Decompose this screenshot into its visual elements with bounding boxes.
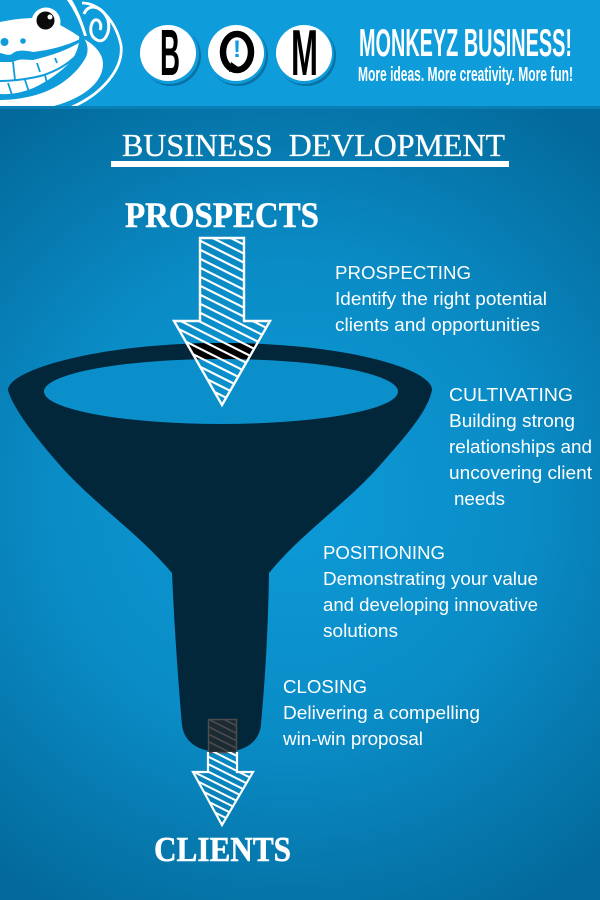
text: prospecting: PROSPECTING: [335, 262, 471, 283]
header band: [0, 0, 600, 109]
icon: monkey logo: [0, 0, 121, 107]
heading: prospects: PROSPECTS: [125, 195, 319, 235]
logo circle O: !: [233, 36, 241, 63]
text: prospecting: [335, 262, 547, 335]
logo circle B: [139, 16, 201, 89]
text: cultivating: [449, 384, 593, 509]
heading: clients: CLIENTS: [154, 830, 291, 869]
arrow: clients leaving funnel: [191, 718, 255, 828]
text: prospecting: Identify the right potential: [335, 288, 547, 309]
text: prospecting: clients and opportunities: [335, 314, 540, 335]
text: closing: Delivering a compelling: [283, 702, 480, 723]
text: cultivating: CULTIVATING: [449, 384, 573, 405]
logo circle O: [206, 24, 268, 86]
text: positioning: [323, 542, 538, 641]
logo circle B: B: [160, 16, 180, 89]
logo circle M: [274, 16, 336, 89]
text: closing: win-win proposal: [282, 728, 423, 749]
text: cultivating: Building strong: [449, 410, 575, 431]
text: closing: CLOSING: [283, 676, 367, 697]
logo circle M: M: [291, 16, 318, 89]
text: positioning: Demonstrating your value: [323, 568, 538, 589]
text: positioning: solutions: [323, 620, 398, 641]
text: positioning: and developing innovative: [323, 594, 538, 615]
arrow: prospects entering funnel: [172, 236, 272, 408]
title: BUSINESS DEVLOPMENT: [122, 127, 505, 163]
text: cultivating: uncovering client: [449, 462, 593, 483]
funnel: [8, 343, 432, 752]
text: closing: [282, 676, 480, 749]
text: positioning: POSITIONING: [323, 542, 445, 563]
text: cultivating: needs: [454, 488, 505, 509]
text: cultivating: relationships and: [449, 436, 592, 457]
